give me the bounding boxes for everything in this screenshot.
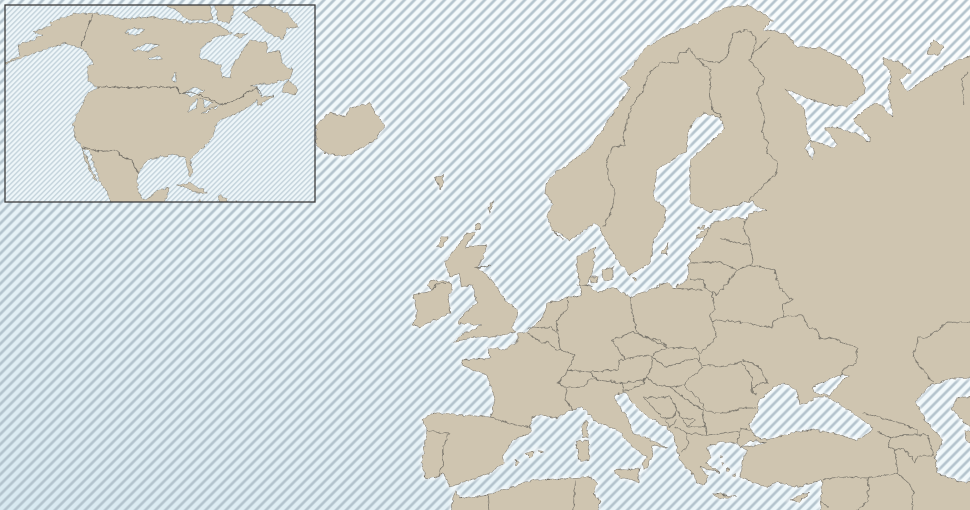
Ireland (413, 280, 453, 327)
inset land and borders (0, 3, 298, 206)
Great Britain (445, 233, 518, 343)
Iceland (316, 103, 385, 157)
coastal glow (316, 5, 970, 510)
European and Russian mainland (422, 5, 970, 510)
inset frame (5, 5, 315, 202)
inset land (0, 3, 298, 206)
inset hatch (5, 5, 315, 202)
inset: North America (0, 3, 315, 206)
European landmass, islands and borders (316, 5, 970, 510)
European islands and North Africa (435, 40, 970, 510)
inset sea (5, 5, 315, 202)
country borders (427, 30, 970, 510)
inset borders (81, 14, 262, 173)
